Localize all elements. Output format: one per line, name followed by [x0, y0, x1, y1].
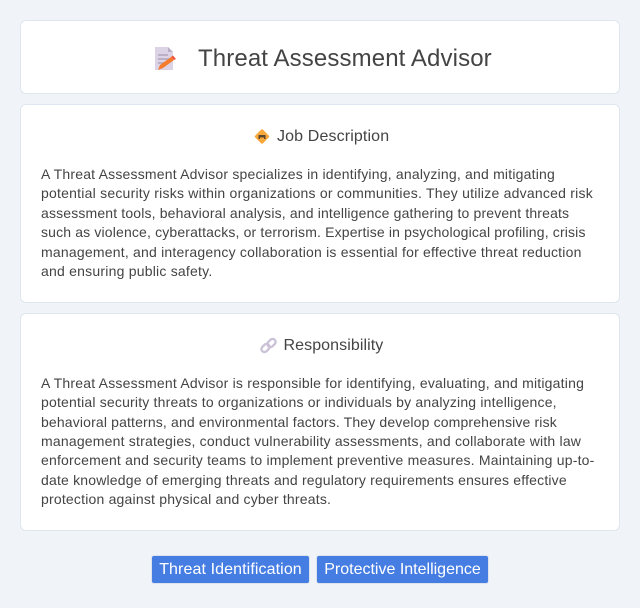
text: potential security risks within organizations or communities. They utilize advanced risk — [41, 185, 593, 201]
text: enforcement and security teams to implement preventive measures. Maintaining up-to- — [41, 452, 595, 468]
icon: document with pencil — [155, 47, 176, 70]
text: management, and interagency collaboration is essential for effective threat reduction — [41, 244, 582, 260]
text: date knowledge of emerging threats and regulatory requirements ensures effective — [41, 472, 567, 488]
text: potential security threats to organizations or individuals by analyzing intelligence, — [41, 394, 557, 410]
panel: title — [20, 20, 620, 94]
panel: responsibility — [20, 313, 620, 531]
text block: job description — [41, 166, 593, 279]
text: management strategies, conduct vulnerability assessments, and collaborate with law — [41, 433, 581, 449]
panel: job description — [20, 104, 620, 303]
tag: threat identification — [151, 555, 310, 584]
text: and ensuring public safety. — [41, 263, 212, 279]
text: protection against physical and cyber threats. — [41, 491, 331, 507]
text: A Threat Assessment Advisor is responsible for identifying, evaluating, and mitigating — [41, 375, 584, 391]
text: behavioral patterns, and environmental factors. They develop comprehensive risk — [41, 414, 557, 430]
tag: protective intelligence: Protective Intelligence — [324, 561, 481, 578]
text: A Threat Assessment Advisor specializes in identifying, analyzing, and mitigating — [41, 166, 555, 182]
text block: responsibility — [41, 375, 595, 507]
text: assessment tools, behavioral analysis, and intelligence gathering to prevent threats — [41, 205, 569, 221]
heading: title text: Threat Assessment Advisor — [198, 45, 492, 72]
heading: responsibility: Responsibility — [284, 337, 383, 354]
tag: threat identification: Threat Identification — [159, 561, 302, 578]
icon: warning diamond — [254, 129, 270, 144]
icon: chain link — [260, 338, 277, 354]
heading: job description: Job Description — [277, 128, 389, 145]
tag: protective intelligence — [316, 555, 489, 584]
text: such as violence, cyberattacks, or terrorism. Expertise in psychological profiling, crisis — [41, 224, 586, 240]
